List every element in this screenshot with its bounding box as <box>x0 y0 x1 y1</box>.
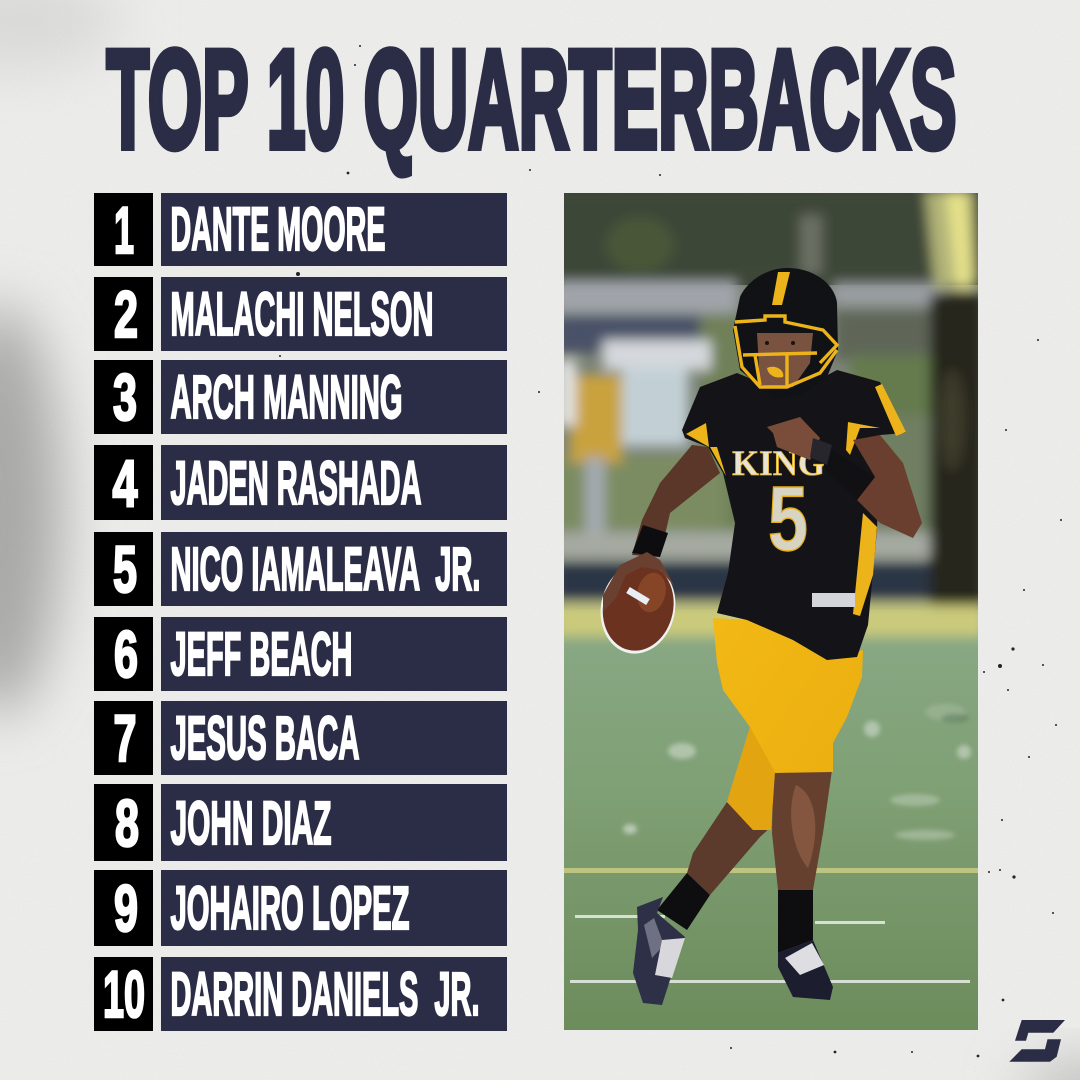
hand on chest <box>767 417 820 460</box>
row 7: 7 <box>114 701 136 775</box>
ball stripe <box>628 590 648 602</box>
throwing hand <box>603 552 675 612</box>
row 4: JADEN RASHADA <box>170 449 422 517</box>
row 10 <box>94 957 507 1031</box>
row 3: 3 <box>113 360 137 434</box>
jersey <box>682 370 905 660</box>
row 9: 9 <box>114 871 138 945</box>
rear leg <box>687 802 772 895</box>
speckles <box>279 45 1062 1057</box>
row 5: 5 <box>113 532 137 606</box>
row 6: JEFF BEACH <box>170 620 352 688</box>
row 4 <box>94 445 507 520</box>
row 3: ARCH MANNING <box>170 363 402 431</box>
row 7: JESUS BACA <box>170 704 360 772</box>
row 6 <box>94 617 507 691</box>
row 8: 8 <box>115 786 139 860</box>
ranking list <box>94 193 507 1031</box>
row 4: 4 <box>112 446 138 520</box>
shorts <box>713 618 863 830</box>
quarterback <box>592 268 922 1005</box>
jersey number: 5 <box>768 468 808 570</box>
right arm <box>853 435 922 538</box>
row 10: DARRIN DANIELS JR. <box>170 960 480 1028</box>
row 8: JOHN DIAZ <box>170 789 332 857</box>
row 9: JOHAIRO LOPEZ <box>170 874 410 942</box>
left arm <box>632 445 720 557</box>
KING lettering: KING <box>732 443 825 483</box>
row 2: 2 <box>114 277 138 351</box>
row 5 <box>94 532 507 606</box>
right wristband <box>823 464 875 500</box>
helmet <box>733 268 838 398</box>
row 1: DANTE MOORE <box>170 195 386 263</box>
row 7 <box>94 701 507 775</box>
field markings <box>623 704 971 840</box>
logo <box>1009 1020 1065 1062</box>
front leg <box>772 770 832 890</box>
row 9 <box>94 870 507 946</box>
blurred stadium background <box>550 190 990 1030</box>
row 10: 10 <box>103 957 145 1031</box>
jersey tag <box>812 593 855 607</box>
socks <box>657 873 710 930</box>
jersey gold trim <box>686 384 906 616</box>
yard lines <box>564 868 978 983</box>
football <box>600 567 676 654</box>
row 6: 6 <box>114 617 138 691</box>
row 5: NICO IAMALEAVA JR. <box>170 535 480 603</box>
row 2 <box>94 277 507 351</box>
row 3 <box>94 360 507 434</box>
left wristband <box>632 525 668 557</box>
row 2: MALACHI NELSON <box>170 280 434 348</box>
row 1 <box>94 193 507 267</box>
watch <box>810 438 832 465</box>
row 1: 1 <box>114 193 134 267</box>
shoes <box>633 897 685 1005</box>
photo panel: quarterback running on field <box>550 190 990 1030</box>
